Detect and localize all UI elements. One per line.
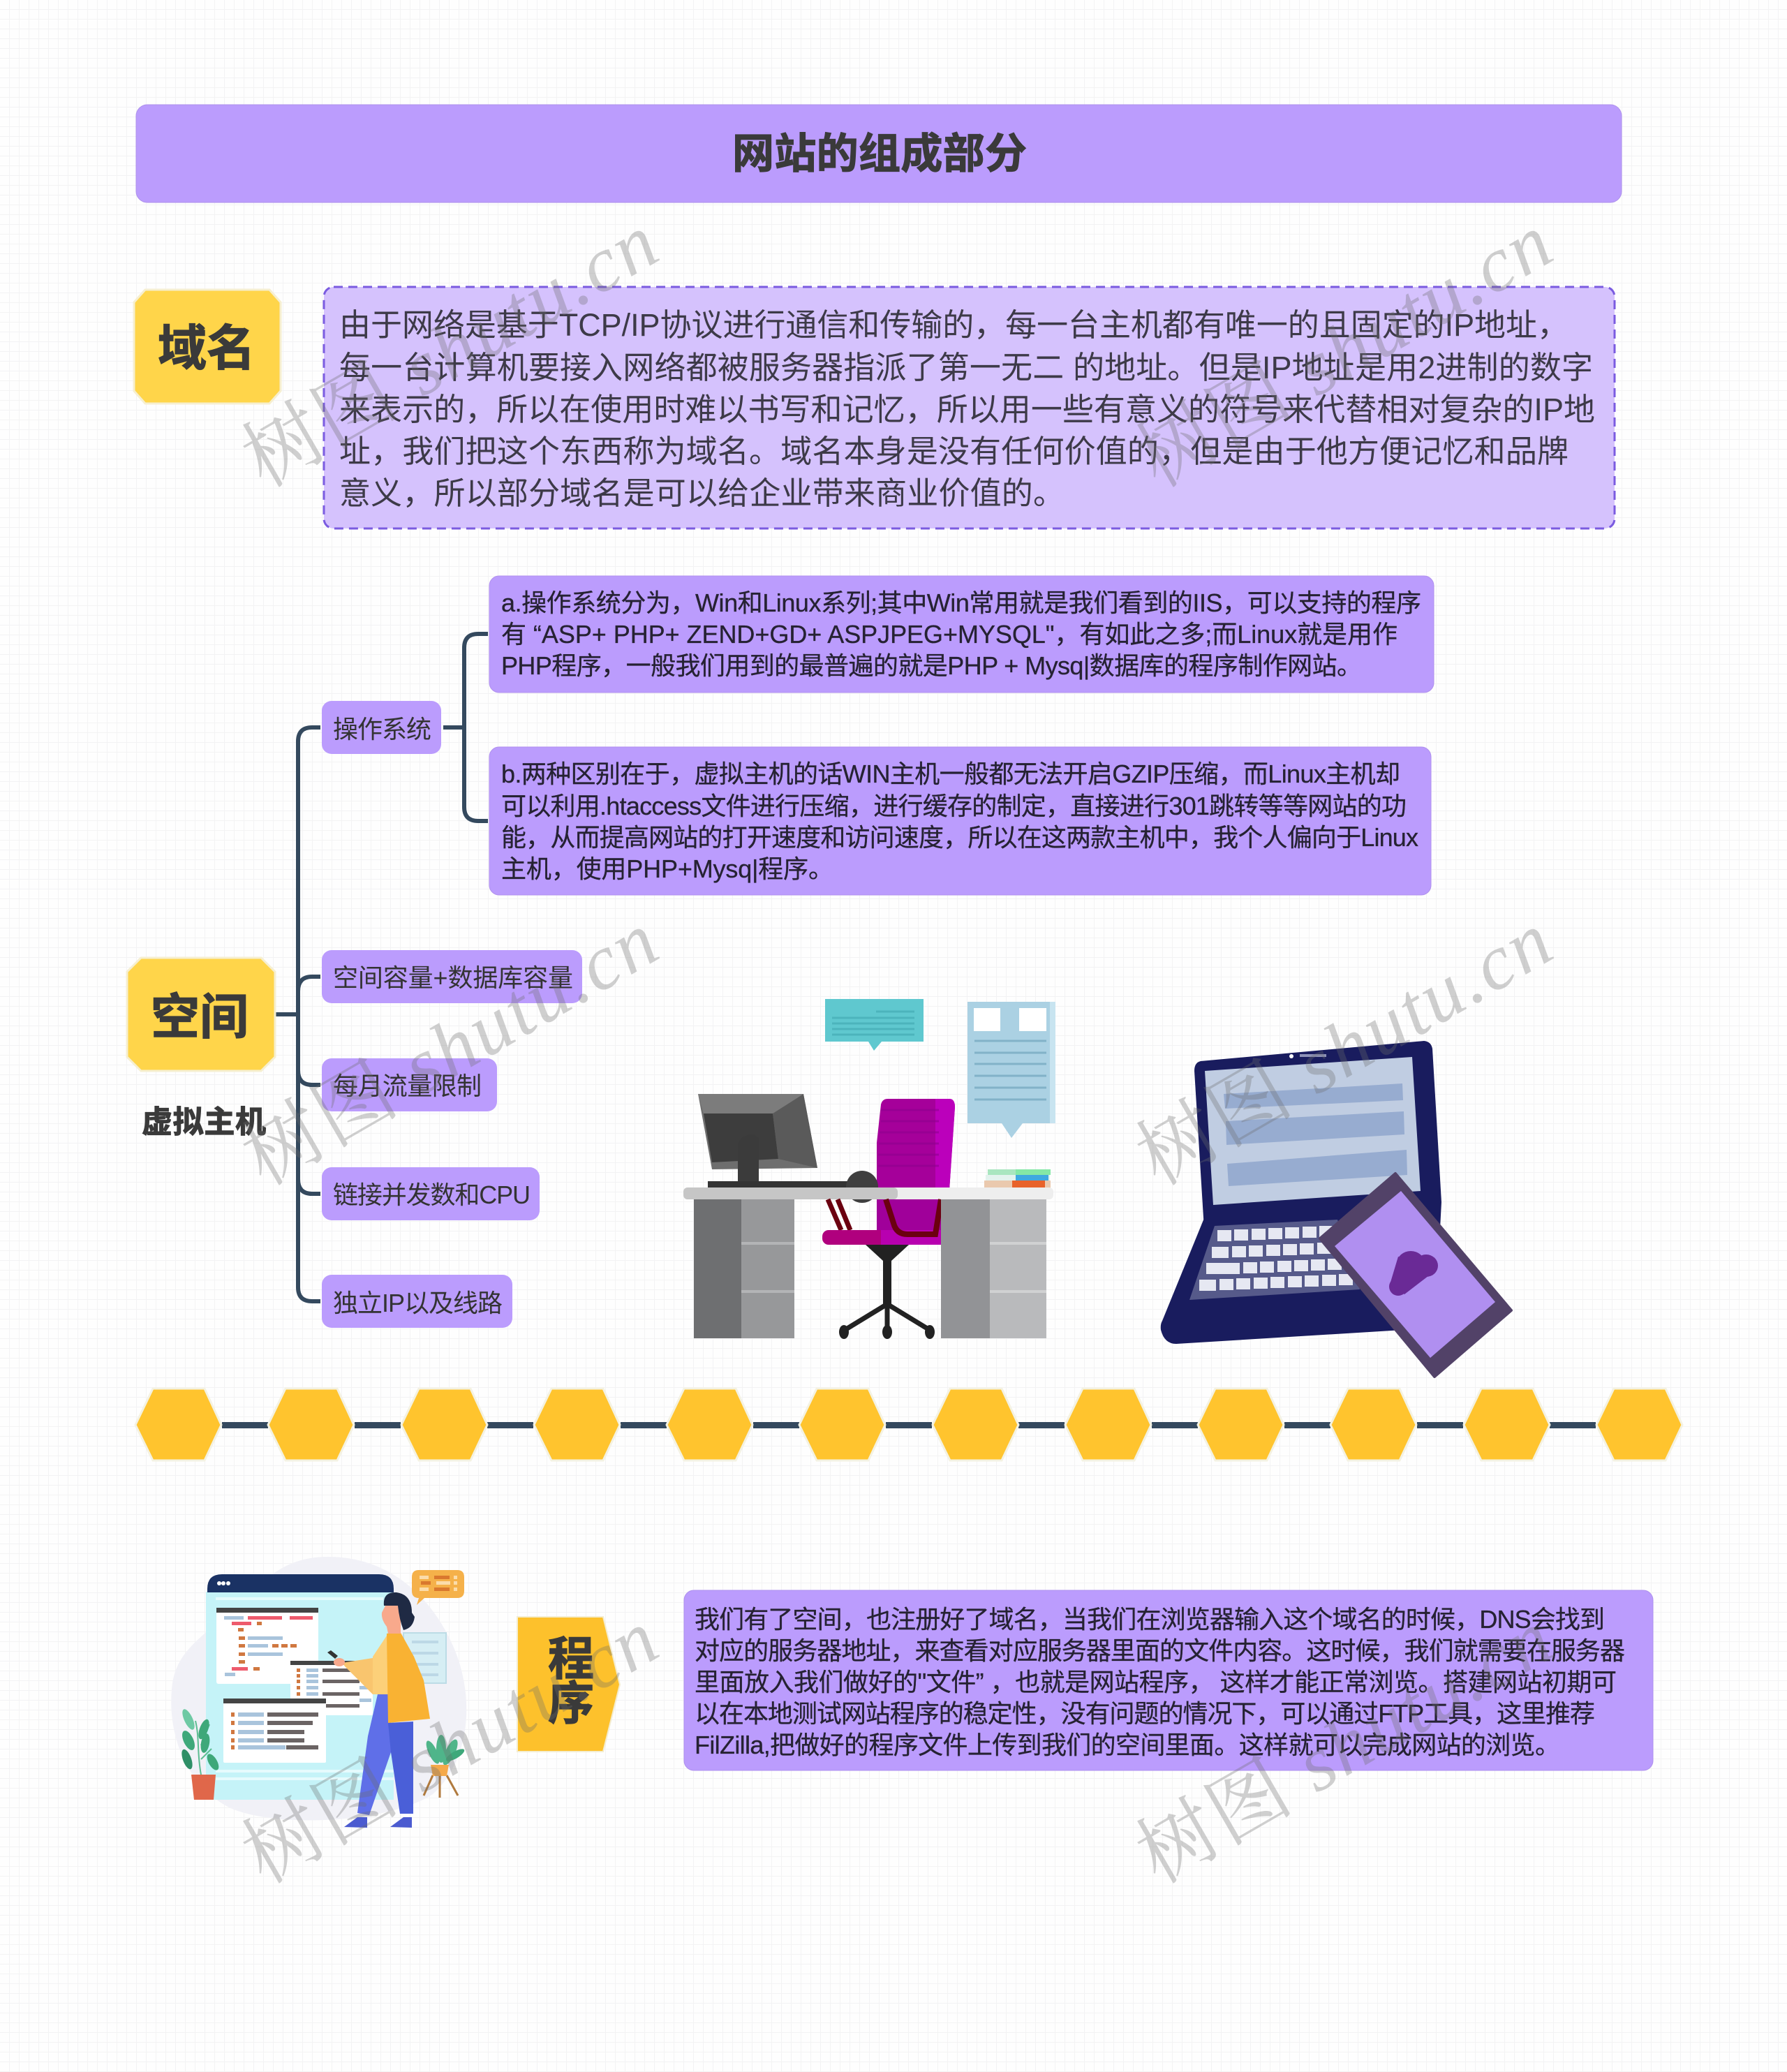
illustration: laptop and tablet [1161, 1041, 1511, 1377]
book stack [984, 1169, 1051, 1188]
space label [127, 958, 275, 1071]
node: dedicated IP: 独立IP以及线路 [333, 1289, 503, 1317]
program description: 以在本地测试网站程序的稳定性，没有问题的情况下，可以通过FTP工具，这里推荐 [695, 1699, 1595, 1728]
virtual host caption: 虚拟主机 [142, 1105, 266, 1139]
desk left pedestal [694, 1199, 794, 1338]
title [136, 105, 1622, 202]
watermarks: 树图 shutu.cn [1124, 896, 1566, 1202]
hexagons [135, 1389, 1682, 1460]
watermarks: 树图 shutu.cn [1124, 198, 1566, 504]
panel: domain name [134, 287, 1615, 528]
teal speech bubble [825, 999, 924, 1051]
browser window [206, 1574, 394, 1800]
note a: PHP程序，一般我们用到的最普遍的就是PHP + Mysq|数据库的程序制作网站。 [501, 651, 1362, 680]
note b: 能，从而提高网站的打开速度和访问速度，所以在这两款主机中，我个人偏向于Linux [501, 823, 1418, 852]
node: dedicated IP [322, 1275, 512, 1328]
note a: 有 “ASP+ PHP+ ZEND+GD+ ASPJPEG+MYSQL"，有如此之多;而Linux就是用作 [501, 620, 1397, 649]
side panel [403, 1633, 446, 1683]
desk right pedestal [941, 1199, 1046, 1338]
program description: FilZilla,把做好的程序文件上传到我们的空间里面。这样就可以完成网站的浏览。 [695, 1731, 1560, 1759]
node: concurrency and CPU [322, 1167, 540, 1220]
node: operating system: 操作系统 [333, 715, 431, 743]
panel: hosting space tree [127, 576, 1434, 1328]
note a: a.操作系统分为，Win和Linux系列;其中Win常用就是我们看到的IIS，可以支持的程序 [501, 589, 1421, 617]
background blob [171, 1557, 466, 1820]
watermarks: 树图 shutu.cn [229, 896, 672, 1202]
program description: 里面放入我们做好的"文件” ，也就是网站程序， 这样才能正常浏览。搭建网站初期可 [695, 1668, 1617, 1696]
domain description: 意义，所以部分域名是可以给企业带来商业价值的。 [339, 475, 1065, 511]
node: operating system [322, 701, 441, 754]
code window 3 [223, 1699, 326, 1763]
note b: 可以利用.htaccess文件进行压缩，进行缓存的制定，直接进行301跳转等等网站的功 [501, 792, 1407, 820]
node: capacity: 空间容量+数据库容量 [333, 963, 573, 992]
hexagon divider [135, 1389, 1682, 1460]
illustration: office desk [683, 999, 1055, 1339]
watermarks [229, 198, 1566, 1900]
laptop screen [1194, 1041, 1441, 1229]
domain label [134, 290, 281, 404]
desk top [683, 1187, 1053, 1199]
domain label: 域名 [158, 321, 255, 376]
code window 1 [216, 1608, 318, 1684]
chair seat and base [822, 1199, 941, 1339]
blue document bubble [967, 1002, 1055, 1138]
domain description: 来表示的，所以在使用时难以书写和记忆，所以用一些有意义的符号来代替相对复杂的IP地 [339, 392, 1595, 427]
title: 网站的组成部分 [732, 131, 1027, 177]
right plant on stool [424, 1735, 466, 1798]
tree connectors [275, 634, 488, 1301]
programmer figure [327, 1592, 430, 1828]
illustration: programmer with code windows [171, 1557, 466, 1828]
note b: b.两种区别在于，虚拟主机的话WIN主机一般都无法开启GZIP压缩，而Linux主机却 [501, 760, 1400, 788]
program label: 程 [548, 1633, 594, 1685]
note b: 主机，使用PHP+Mysq|程序。 [501, 854, 833, 883]
office chair back [877, 1099, 955, 1190]
note b [489, 747, 1431, 895]
node: concurrency and CPU: 链接并发数和CPU [333, 1181, 531, 1209]
program description: 我们有了空间，也注册好了域名，当我们在浏览器输入这个域名的时候，DNS会找到 [695, 1605, 1605, 1634]
monitor [698, 1094, 878, 1203]
tablet with cloud [1320, 1174, 1511, 1377]
node: capacity [322, 950, 582, 1003]
program label [517, 1617, 620, 1752]
domain description: 每一台计算机要接入网络都被服务器指派了第一无二 的地址。但是IP地址是用2进制的数字 [339, 350, 1593, 385]
watermarks: 树图 shutu.cn [1124, 1594, 1566, 1900]
program description: 对应的服务器地址，来查看对应服务器里面的文件内容。这时候，我们就需要在服务器 [695, 1636, 1625, 1665]
connector bars [222, 1422, 1596, 1428]
left potted plant [179, 1708, 221, 1800]
node: monthly traffic [322, 1058, 497, 1111]
node: monthly traffic: 每月流量限制 [333, 1072, 482, 1100]
watermarks: 树图 shutu.cn [229, 1594, 672, 1900]
code window 2 [290, 1661, 373, 1715]
laptop base [1161, 1218, 1438, 1344]
program description [684, 1590, 1653, 1770]
domain description: 址，我们把这个东西称为域名。域名本身是没有任何价值的，但是由于他方便记忆和品牌 [339, 434, 1569, 469]
speech bubble [412, 1570, 464, 1605]
note a [489, 576, 1434, 693]
domain description: 由于网络是基于TCP/IP协议进行通信和传输的，每一台主机都有唯一的且固定的IP地址， [339, 307, 1569, 343]
space label: 空间 [151, 990, 249, 1044]
watermarks: 树图 shutu.cn [229, 198, 672, 504]
program label: 序 [548, 1678, 594, 1729]
domain description [324, 287, 1615, 528]
